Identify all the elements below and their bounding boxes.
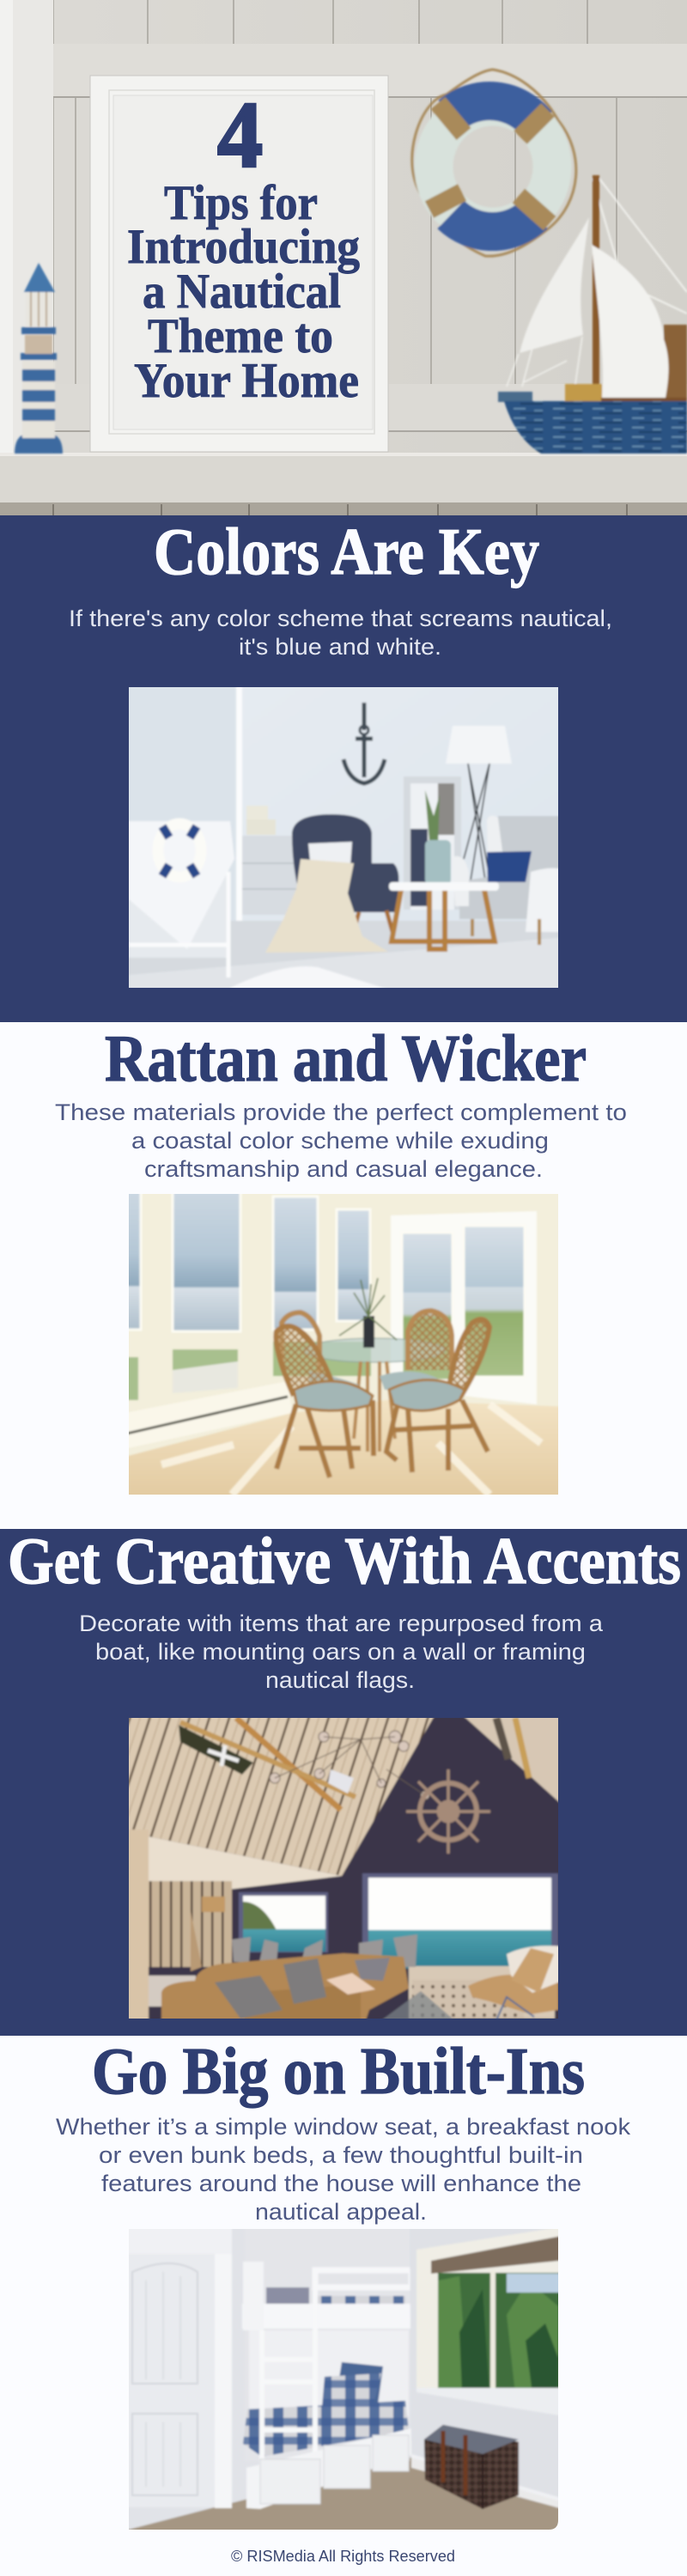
heading: Rattan and Wicker	[105, 1021, 587, 1095]
vase and plant	[425, 790, 440, 846]
body text: or even bunk beds, a few thoughtful built-in	[99, 2142, 583, 2168]
body text: boat, like mounting oars on a wall or framing	[95, 1639, 586, 1665]
life ring small	[158, 824, 201, 877]
ladder	[262, 2281, 315, 2465]
lamp and model boat	[202, 1897, 225, 1912]
bed	[149, 1976, 196, 2007]
right wall and window	[410, 2212, 575, 2506]
grey armchair	[459, 816, 575, 919]
vase and plant	[339, 1278, 397, 1348]
carpet	[112, 2457, 575, 2547]
frame: title poster	[90, 76, 388, 452]
back chairs	[282, 1311, 452, 1379]
panel: get creative with accents	[0, 1524, 687, 2036]
body text: craftsmanship and casual elegance.	[144, 1156, 543, 1182]
body text: Decorate with items that are repurposed from a	[79, 1611, 604, 1636]
small window	[239, 1892, 328, 1952]
icon: lighthouse	[15, 263, 63, 454]
body text	[55, 1099, 627, 1182]
panel: rattan and wicker	[55, 1021, 627, 1512]
heading: Colors Are Key	[154, 515, 539, 588]
cabinet	[409, 1966, 555, 2019]
lower bunk backdrop	[249, 2330, 409, 2416]
body text: a coastal color scheme while exuding	[131, 1128, 549, 1154]
table	[304, 1338, 445, 1362]
photo corner	[549, 2520, 558, 2530]
door frame	[391, 1211, 537, 1404]
large window	[362, 1873, 558, 1959]
title number: 4	[217, 82, 263, 187]
floor lamp	[446, 726, 512, 764]
heading: Go Big on Built-Ins	[92, 2034, 585, 2108]
body text: nautical flags.	[265, 1667, 415, 1693]
icon: life ring	[412, 70, 576, 256]
upper bunk	[266, 2287, 309, 2311]
panel: colors are key	[0, 515, 687, 1022]
crib blanket	[112, 868, 228, 958]
icon: sailboat	[498, 175, 687, 454]
drawers	[246, 2428, 411, 2509]
anchor	[344, 703, 385, 783]
ship wheel	[406, 1769, 490, 1854]
body text: it's blue and white.	[239, 634, 441, 660]
photo: bunk bed room	[129, 2229, 558, 2530]
body text: nautical appeal.	[255, 2199, 427, 2225]
trunk	[424, 2425, 519, 2509]
mirror	[404, 776, 461, 910]
chandelier	[270, 1731, 429, 1800]
body text: If there's any color scheme that screams nautical,	[69, 606, 612, 631]
title text: Tips for	[164, 176, 318, 230]
photo: blue and white living room	[129, 687, 558, 988]
photo: rattan dining set by the sea	[129, 1194, 558, 1495]
mattress	[243, 2401, 409, 2457]
body text	[79, 1611, 604, 1693]
body text: These materials provide the perfect complement to	[55, 1099, 627, 1125]
body text: features around the house will enhance the	[101, 2171, 581, 2196]
footer copyright: © RISMedia All Rights Reserved	[231, 2548, 455, 2565]
body text	[56, 2114, 631, 2225]
title text: Theme to	[148, 309, 333, 363]
title text: a Nautical	[143, 265, 341, 319]
title text: Your Home	[134, 354, 359, 408]
panel: go big on built-ins	[56, 2034, 631, 2547]
front right chair	[386, 1319, 489, 1472]
body text	[69, 606, 612, 660]
nook	[245, 2212, 410, 2461]
oars	[179, 1718, 529, 1810]
body text: Whether it’s a simple window seat, a breakfast nook	[56, 2114, 631, 2140]
glass table	[361, 1991, 472, 2036]
lounge chair	[468, 1963, 558, 2014]
cushions behind sofa	[232, 1934, 417, 1967]
navy chair	[292, 814, 398, 912]
panel: hero photo with title frame	[0, 0, 687, 515]
windows	[112, 1177, 525, 1380]
coffee table	[392, 890, 495, 949]
door	[112, 2212, 232, 2254]
dresser	[242, 836, 298, 915]
front left chair	[276, 1326, 374, 1477]
photo: attic lounge with oars and ship wheel	[129, 1718, 558, 2019]
floor	[112, 1400, 575, 1512]
pillows	[335, 2362, 383, 2405]
rug	[230, 966, 438, 1005]
sofa	[161, 1953, 409, 2036]
cream throw	[265, 859, 388, 953]
title text	[127, 176, 360, 408]
title text: Introducing	[127, 220, 360, 274]
